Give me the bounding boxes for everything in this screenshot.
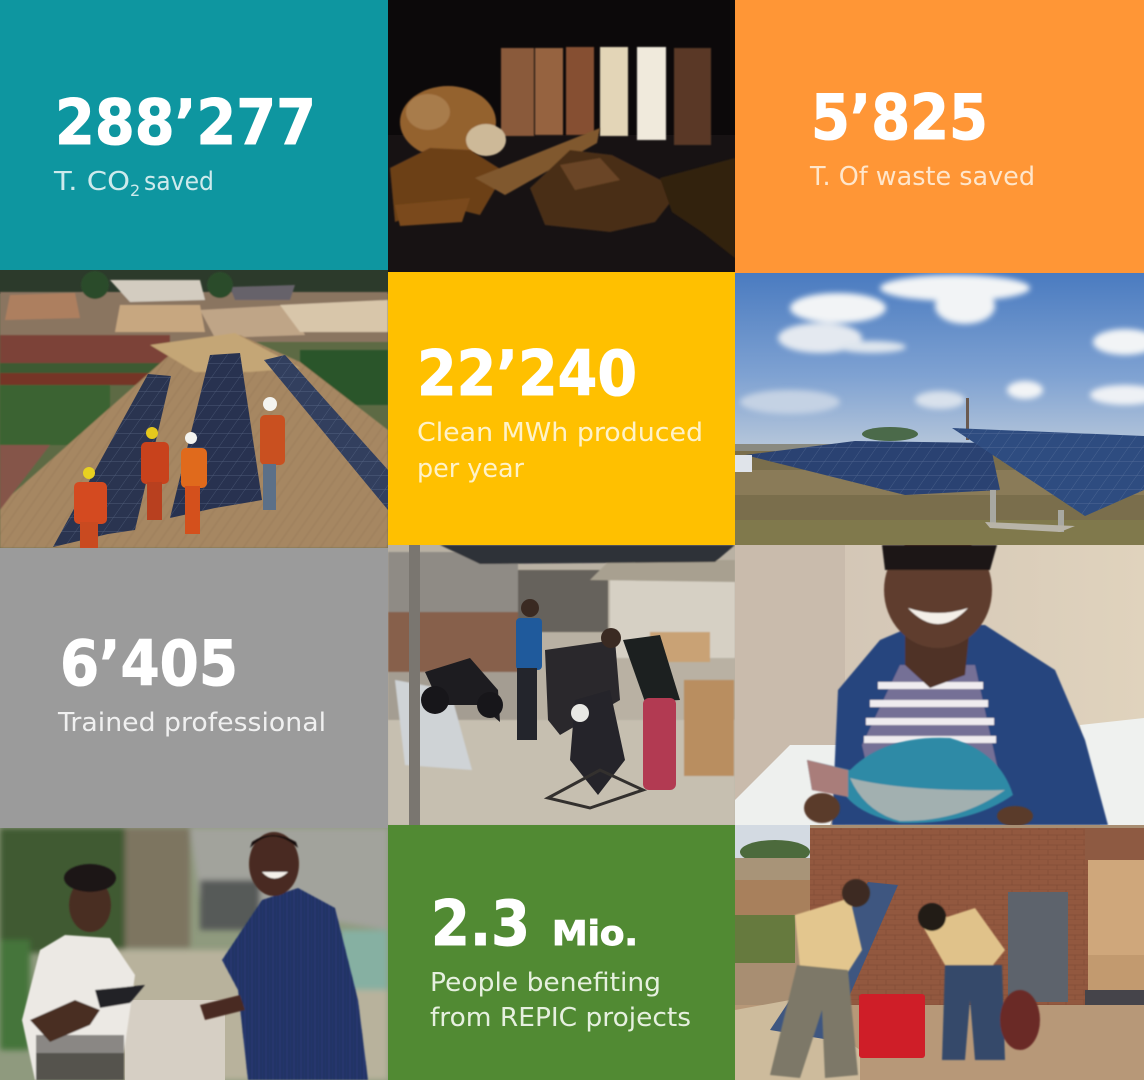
label: T. CO2 saved: 2 [130,181,140,200]
photo: ground-mounted solar array [735,273,1144,545]
figure: woman in navy jacket [832,532,1108,825]
stat: 2.3 Mio.: 2.3 [431,887,530,960]
label: Trained professional: Trained professional [57,708,326,738]
label: Clean MWh produced per year [417,418,703,484]
label: Clean MWh produced per year: Clean MWh produced [417,418,703,448]
stat: 22'240: 22’240 [417,337,637,410]
panel: clean energy [388,272,735,545]
label: Clean MWh produced per year: per year [417,454,524,484]
label: People benefiting from REPIC projects [430,968,691,1033]
photo: motorcycle workshop [388,545,735,825]
photo: woman holding a fish [735,532,1144,826]
label: People benefiting from REPIC projects: from REPIC projects [430,1003,691,1033]
label: T. CO2 saved: saved [144,167,214,197]
photo: technicians unpacking solar equipment [735,825,1144,1080]
stat: 2.3 Mio.: Mio. [552,914,638,954]
figure: woman in white t-shirt [22,864,145,1080]
photo: wood material samples [388,0,735,272]
icon: blue fish [804,738,1033,826]
figure: technicians in beige shirts [770,879,1040,1078]
figures: workers in orange [74,397,285,548]
label: T. Of waste saved: T. Of waste saved [809,162,1035,192]
label: People benefiting from REPIC projects: People benefiting [430,968,661,998]
clouds [740,275,1144,414]
stat: 6'405: 6’405 [60,627,238,700]
photo: two aquaculture trainees [0,828,388,1080]
panel: trained professionals [0,548,388,828]
icon: red battery box [859,994,925,1058]
stat: 2.3 Mio. [431,887,638,960]
panel: people benefiting [388,825,735,1080]
stat: 5'825: 5’825 [811,81,988,154]
panel: waste saved [735,0,1144,273]
figures: mechanics and motorcycles [421,599,680,808]
photo: workers installing rooftop solar panels [0,270,388,548]
solar panel rows [745,428,1144,516]
figure: man in blue striped wrap [200,832,368,1080]
panel: CO2 saved [0,0,388,270]
label: T. CO2 saved: T. CO [53,167,130,197]
stat: 288'277: 288’277 [55,86,316,159]
label: T. CO2 saved [53,167,214,200]
